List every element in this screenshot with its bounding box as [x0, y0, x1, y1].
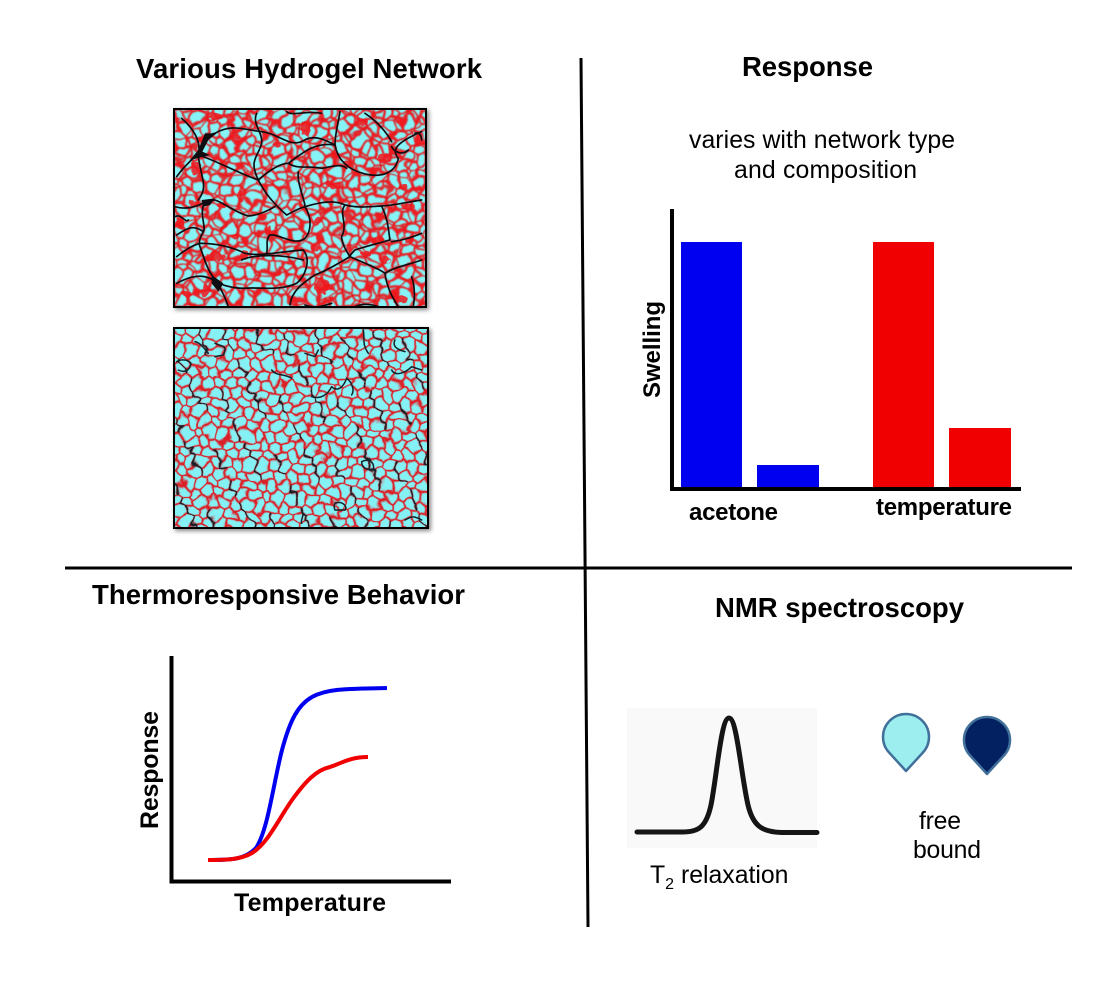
bar chart: swelling — [639, 209, 1021, 526]
curve: red — [208, 757, 368, 860]
line chart: response vs temperature — [136, 656, 451, 917]
text: varies with network type and composition: and composition — [734, 157, 917, 184]
label: T2 relaxation: relaxation — [674, 862, 788, 889]
legend text: free and bound — [913, 808, 981, 864]
label: T2 relaxation: 2 — [665, 876, 674, 893]
axes — [172, 656, 451, 882]
label: T2 relaxation: T — [650, 862, 665, 889]
bar: temperature low — [949, 428, 1011, 487]
bar: temperature high — [873, 242, 934, 487]
image: loosely crosslinked network — [172, 107, 432, 313]
x axis label: Temperature — [234, 889, 386, 917]
bar: acetone high — [681, 242, 742, 487]
text: varies with network type and composition — [689, 127, 955, 184]
panel: various hydrogel network — [136, 53, 483, 542]
label: acetone: acetone — [689, 499, 778, 526]
heading: thermoresponsive behavior: Thermoresponsive Behavior — [92, 579, 465, 610]
heading: various hydrogel network: Various Hydrogel Network — [136, 53, 483, 84]
heading: NMR spectroscopy: NMR spectroscopy — [715, 592, 965, 623]
label: temperature: temperature — [876, 494, 1012, 521]
divider: vertical — [581, 58, 588, 927]
heading: response: Response — [742, 51, 873, 82]
chart: T2 relaxation peak — [627, 708, 817, 848]
image: densely crosslinked network — [172, 326, 434, 534]
icon: bound water drop — [964, 717, 1010, 774]
panel: response — [639, 51, 1021, 526]
text: varies with network type and composition: varies with network type — [689, 127, 955, 154]
y axis label: Swelling — [639, 301, 666, 398]
axes — [672, 209, 1021, 489]
panel: NMR spectroscopy — [627, 592, 1010, 893]
bar: acetone low — [757, 465, 819, 487]
y axis label: Response — [136, 711, 164, 829]
icon: free water drop — [883, 714, 929, 771]
divider: horizontal — [65, 566, 1072, 570]
legend text: free and bound: bound — [913, 837, 981, 864]
legend text: free and bound: free — [919, 808, 961, 835]
curve: blue — [208, 688, 387, 860]
panel: thermoresponsive behavior — [92, 579, 465, 917]
